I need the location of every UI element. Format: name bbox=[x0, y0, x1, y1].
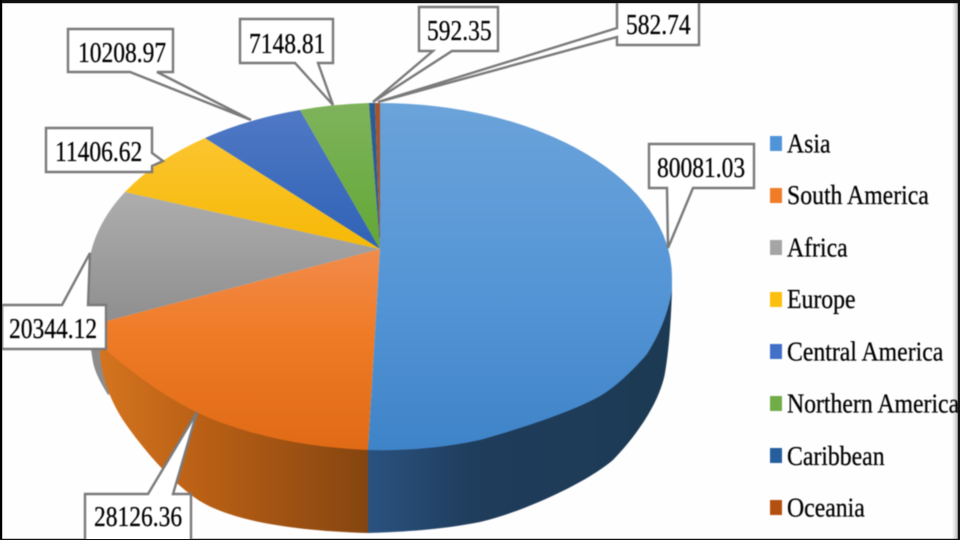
callout: Asia 80081.03 bbox=[649, 144, 754, 248]
legend item: Oceania: Oceania bbox=[787, 492, 865, 523]
slice: Oceania bbox=[375, 103, 380, 249]
legend item: South America: South America bbox=[787, 180, 929, 210]
callout: Oceania 582.74 bbox=[378, 2, 699, 102]
slice: South America bbox=[92, 249, 380, 450]
pie side: South America bbox=[92, 323, 368, 533]
callout: Central America 10208.97 bbox=[68, 29, 251, 120]
legend item: Africa: Africa bbox=[787, 232, 848, 263]
legend item: Asia: Asia bbox=[787, 128, 831, 159]
legend bbox=[770, 128, 959, 523]
pie side: Asia bbox=[368, 290, 672, 533]
legend item: Central America: Central America bbox=[787, 336, 943, 367]
slice: Caribbean bbox=[369, 103, 380, 249]
slice: Europe bbox=[125, 138, 380, 249]
callout: Europe 11406.62 bbox=[46, 128, 163, 172]
callout: Caribbean 592.35 bbox=[373, 7, 498, 102]
legend item: Northern America: Northern America bbox=[787, 388, 959, 419]
slice: Northern America bbox=[300, 103, 380, 249]
callout: Northern America 7148.81: 7148.81 bbox=[249, 28, 325, 59]
pie side: Africa bbox=[88, 300, 130, 395]
callout: Caribbean 592.35: 592.35 bbox=[427, 15, 492, 46]
slice: Asia bbox=[368, 103, 672, 450]
legend item: Europe: Europe bbox=[787, 284, 856, 314]
callout: Oceania 582.74: 582.74 bbox=[626, 9, 691, 40]
callout: Africa 20344.12 bbox=[2, 253, 106, 349]
3D pie chart bbox=[88, 103, 672, 533]
callout: Europe 11406.62: 11406.62 bbox=[55, 136, 142, 167]
slice: Africa bbox=[88, 192, 380, 325]
callout: South America 28126.36: 28126.36 bbox=[94, 501, 182, 532]
callout: Northern America 7148.81 bbox=[240, 19, 333, 105]
slice: Central America bbox=[205, 110, 380, 249]
callout: Central America 10208.97: 10208.97 bbox=[78, 37, 166, 68]
legend item: Caribbean: Caribbean bbox=[787, 441, 885, 471]
callout: South America 28126.36 bbox=[85, 412, 197, 540]
callout: Africa 20344.12: 20344.12 bbox=[9, 313, 97, 344]
callout: Asia 80081.03: 80081.03 bbox=[657, 152, 745, 183]
